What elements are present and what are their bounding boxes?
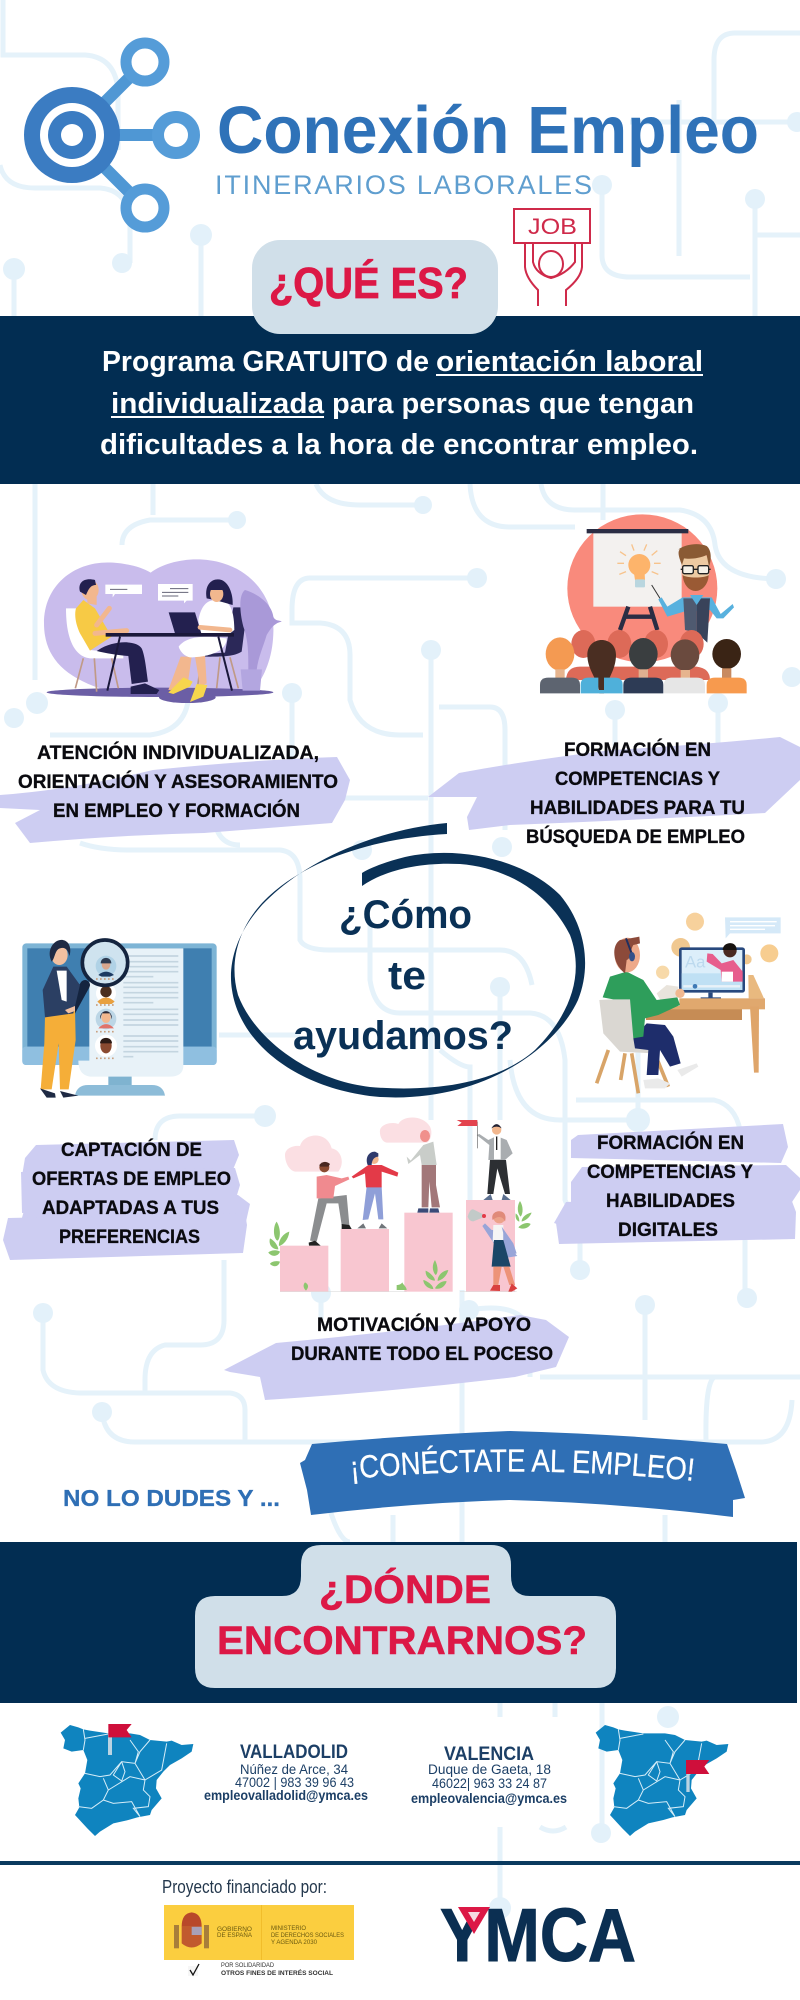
- government logo: POR SOLIDARIDAD: [221, 1963, 275, 1969]
- logo title: Conexión Empleo: [217, 93, 759, 168]
- description paragraph: [100, 346, 703, 461]
- icon: job sign: JOB: [528, 214, 577, 239]
- label panel: job offers: CAPTACIÓN DE: [61, 1139, 202, 1161]
- address: valencia: [411, 1744, 567, 1806]
- description paragraph: para personas que tengan: [332, 388, 694, 420]
- illustration: digital skills: [597, 913, 781, 1093]
- label panel: individual attention: ORIENTACIÓN Y ASESORAMIENTO: [18, 771, 338, 793]
- section band: que es: [0, 240, 800, 484]
- label panel: job offers: OFERTAS DE EMPLEO: [32, 1169, 231, 1190]
- description paragraph: Programa GRATUITO de: [102, 346, 429, 378]
- label panel: training in skills: HABILIDADES PARA TU: [530, 798, 745, 819]
- address: valladolid: [204, 1742, 368, 1803]
- address: valencia: Duque de Gaeta, 18: [428, 1762, 551, 1777]
- center heading: te: [388, 954, 426, 998]
- label panel: job offers: ADAPTADAS A TUS: [42, 1198, 219, 1219]
- map: valladolid: [61, 1724, 193, 1836]
- government logo: GOBIERNO: [217, 1926, 252, 1933]
- icon: tick box: [188, 1964, 199, 1976]
- label panel: digital skills: [554, 1124, 800, 1244]
- label panel: training in skills: FORMACIÓN EN: [564, 739, 711, 761]
- logo icon: [24, 43, 194, 227]
- illustration: training presentation: [540, 514, 747, 693]
- heading text: que es: ¿QUÉ ES?: [269, 258, 468, 308]
- address: valladolid: empleovalladolid@ymca.es: [204, 1788, 368, 1803]
- label panel: digital skills: HABILIDADES: [606, 1191, 735, 1212]
- government logo: [164, 1905, 354, 1977]
- heading text: encontrarnos: ENCONTRARNOS?: [217, 1619, 587, 1663]
- icon: job sign: [514, 209, 590, 306]
- government logo: MINISTERIO: [271, 1925, 306, 1932]
- label panel: motivation: [224, 1314, 569, 1400]
- address: valencia: empleovalencia@ymca.es: [411, 1791, 567, 1806]
- call to action banner: [300, 1431, 745, 1517]
- government logo: DE ESPAÑA: [217, 1930, 253, 1939]
- YMCA logo: YMCA: [440, 1893, 636, 1977]
- address: valencia: VALENCIA: [444, 1744, 534, 1765]
- government logo: OTROS FINES DE INTERÉS SOCIAL: [221, 1969, 333, 1977]
- address: valladolid: VALLADOLID: [240, 1742, 348, 1763]
- illustration: job offers monitor: [22, 940, 217, 1098]
- center heading: [293, 893, 513, 1058]
- label panel: digital skills: DIGITALES: [618, 1220, 718, 1241]
- call to action banner: ¡CONÉCTATE AL EMPLEO!: [352, 1445, 694, 1484]
- map: valencia: [596, 1725, 728, 1836]
- description paragraph: dificultades a la hora de encontrar empleo.: [100, 429, 698, 461]
- label panel: digital skills: FORMACIÓN EN: [597, 1132, 744, 1154]
- footer divider: [0, 1861, 800, 1865]
- heading pill: donde: [195, 1545, 616, 1688]
- label panel: individual attention: [0, 742, 350, 843]
- center brush ring: [231, 823, 585, 1097]
- description paragraph: individualizada: [111, 388, 325, 420]
- call to action lead text: NO LO DUDES Y ...: [63, 1485, 280, 1511]
- label panel: training in skills: [428, 737, 800, 848]
- government logo: Y AGENDA 2030: [271, 1939, 317, 1946]
- funding text: Proyecto financiado por:: [162, 1877, 327, 1897]
- illustration: individual counselling: [44, 559, 282, 703]
- description paragraph: orientación laboral: [436, 346, 703, 378]
- address: valladolid: 47002 | 983 39 96 43: [235, 1775, 354, 1790]
- label panel: digital skills: COMPETENCIAS Y: [587, 1162, 753, 1183]
- label panel: motivation: DURANTE TODO EL POCESO: [291, 1344, 553, 1365]
- label panel: job offers: PREFERENCIAS: [59, 1227, 200, 1248]
- label panel: training in skills: COMPETENCIAS Y: [555, 769, 720, 790]
- address: valladolid: Núñez de Arce, 34: [240, 1762, 348, 1777]
- center heading: ¿Cómo: [339, 893, 472, 937]
- label panel: job offers: [3, 1139, 250, 1260]
- government logo: DE DERECHOS SOCIALES: [271, 1932, 345, 1939]
- illustration: motivation podium: [268, 1118, 532, 1292]
- heading pill: que es: [252, 240, 498, 334]
- address: valencia: 46022| 963 33 24 87: [432, 1776, 547, 1791]
- label panel: individual attention: EN EMPLEO Y FORMACIÓN: [53, 800, 300, 822]
- label panel: training in skills: BÚSQUEDA DE EMPLEO: [526, 826, 745, 848]
- icon: coat of arms: [174, 1912, 209, 1948]
- heading text: donde: ¿DÓNDE: [319, 1566, 491, 1612]
- label panel: motivation: MOTIVACIÓN Y APOYO: [317, 1314, 531, 1336]
- label panel: individual attention: ATENCIÓN INDIVIDUALIZADA,: [37, 742, 319, 764]
- center heading: ayudamos?: [293, 1014, 513, 1058]
- section band: donde encontrarnos: [0, 1542, 797, 1703]
- logo subtitle: ITINERARIOS LABORALES: [215, 170, 592, 200]
- illustration: digital skills: Aa: [685, 952, 706, 971]
